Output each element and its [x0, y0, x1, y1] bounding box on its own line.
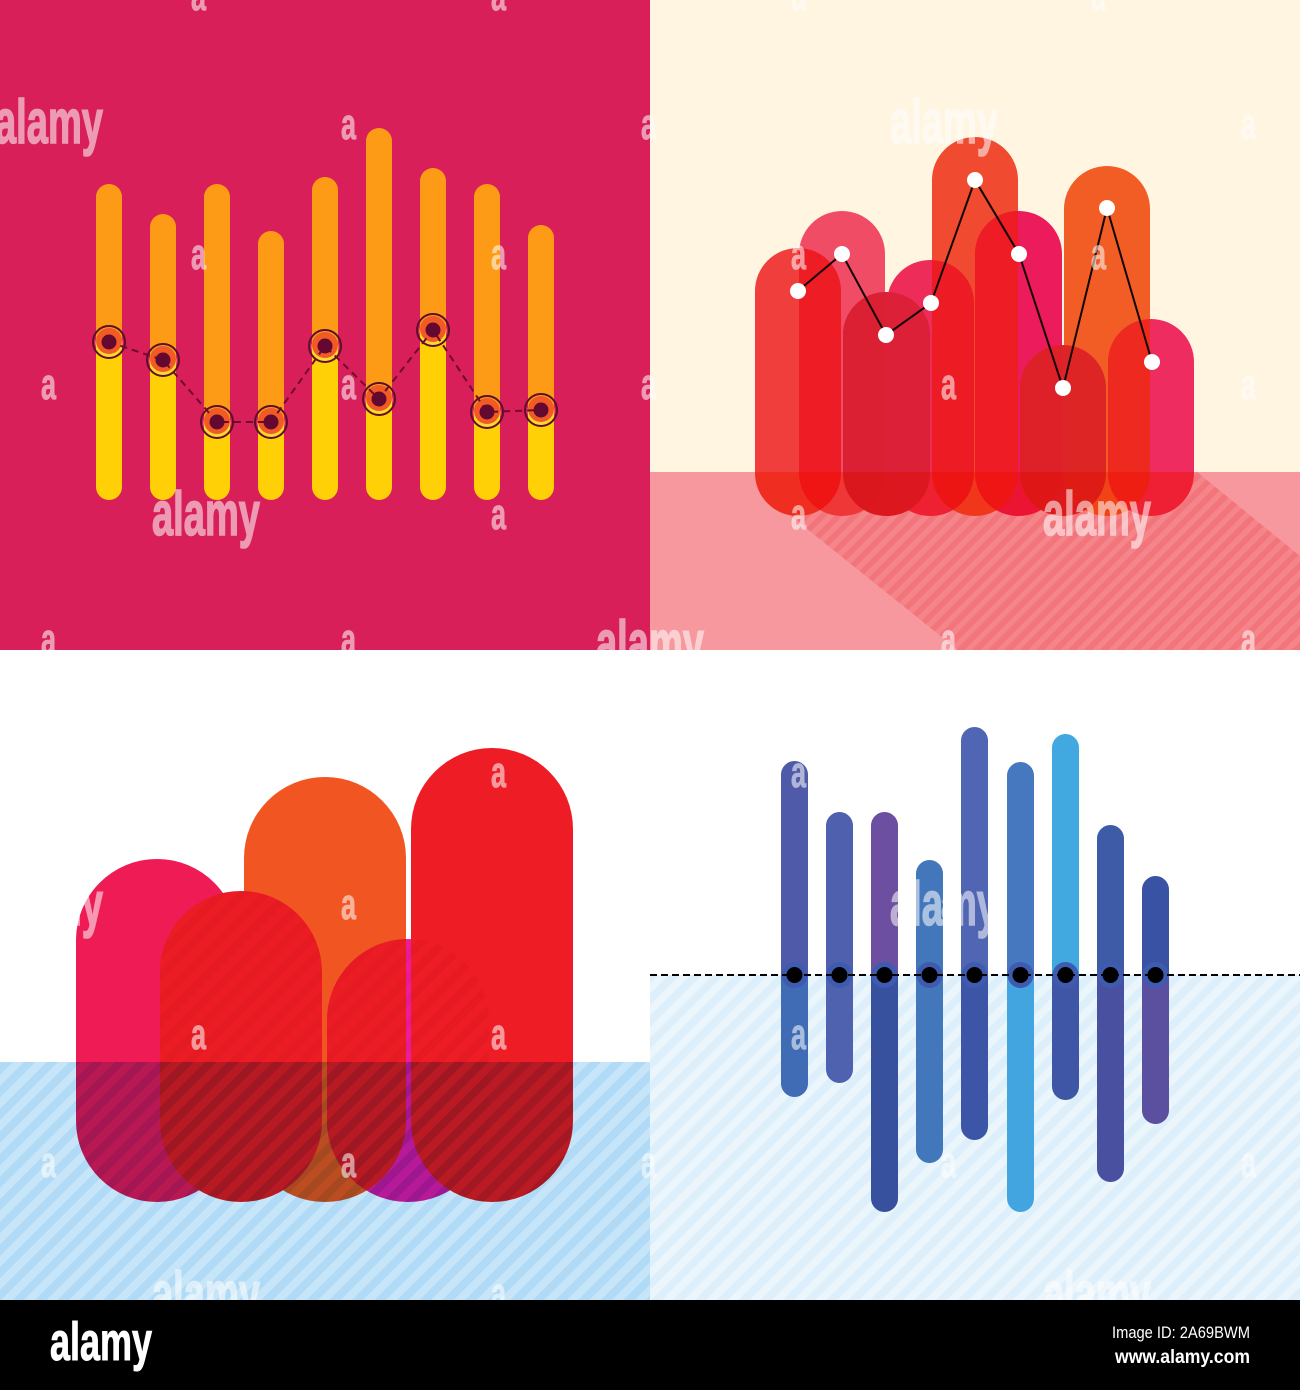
watermarks: a	[491, 1269, 506, 1318]
upper orange bars	[96, 128, 554, 454]
watermarks: a	[1241, 100, 1256, 149]
watermarks: a	[41, 615, 56, 664]
watermarks: alamy	[890, 88, 998, 157]
watermarks: alamy	[0, 88, 103, 157]
watermarks: a	[341, 1138, 356, 1187]
image id: Image ID: 2A69BWM	[1112, 1323, 1250, 1342]
lower bars	[781, 975, 1169, 1212]
watermarks: a	[191, 230, 206, 279]
watermarks: a	[341, 880, 356, 929]
panel: large pills on blue floor	[0, 650, 650, 1300]
watermarks: a	[791, 230, 806, 279]
overlapping red pills	[755, 137, 1194, 516]
panel: crimson bar chart	[0, 0, 650, 650]
watermarks: a	[941, 615, 956, 664]
watermarks: a	[791, 748, 806, 797]
pink floor	[650, 472, 1300, 650]
black dots	[786, 967, 1164, 983]
white data points	[790, 172, 1160, 396]
watermarks: a	[491, 748, 506, 797]
line chart	[798, 180, 1152, 388]
watermarks: alamy	[1043, 1260, 1151, 1329]
upper bars	[781, 727, 1169, 1006]
watermarks: alamy	[596, 609, 704, 678]
data point centres	[102, 322, 548, 430]
panel: cream overlapping pills chart	[650, 0, 1300, 650]
watermarks: a	[641, 100, 656, 149]
watermarks: a	[1241, 1138, 1256, 1187]
watermarks: a	[41, 1138, 56, 1187]
watermarks: a	[341, 615, 356, 664]
data point marker rings	[93, 314, 557, 438]
website: www.alamy.com	[1114, 1347, 1250, 1368]
watermarks: a	[941, 880, 956, 929]
watermarks: a	[491, 230, 506, 279]
watermarks: a	[941, 1138, 956, 1187]
watermarks: a	[191, 1010, 206, 1059]
watermarks: a	[641, 360, 656, 409]
watermarks: a	[1241, 360, 1256, 409]
watermarks: alamy	[1043, 480, 1151, 549]
watermarks: a	[41, 360, 56, 409]
watermarks: a	[641, 1138, 656, 1187]
dashed axis line	[650, 974, 1300, 976]
panel: blue bars on dashed axis	[650, 650, 1300, 1300]
watermarks: a	[341, 100, 356, 149]
watermarks: a	[341, 360, 356, 409]
dashed trend line	[109, 330, 541, 422]
dot halos	[782, 962, 1168, 988]
watermarks: alamy	[152, 1260, 260, 1329]
watermarks: alamy	[890, 870, 998, 939]
watermarks: alamy	[152, 480, 260, 549]
watermarks: a	[1241, 615, 1256, 664]
large pills	[76, 748, 573, 1205]
watermarks: a	[491, 490, 506, 539]
watermarks: a	[941, 360, 956, 409]
watermarks: a	[791, 490, 806, 539]
lower yellow bars	[96, 330, 554, 500]
watermarks: a	[1091, 230, 1106, 279]
footer strip	[0, 1300, 1300, 1390]
blue striped floor	[0, 1062, 650, 1300]
watermarks: a	[491, 1010, 506, 1059]
floor tint on pills	[755, 472, 1194, 516]
pale striped floor	[650, 975, 1300, 1300]
watermarks: a	[791, 1010, 806, 1059]
watermarks: alamy	[0, 870, 103, 939]
footer logo: alamy	[50, 1312, 152, 1372]
long striped shadow	[786, 472, 1300, 650]
